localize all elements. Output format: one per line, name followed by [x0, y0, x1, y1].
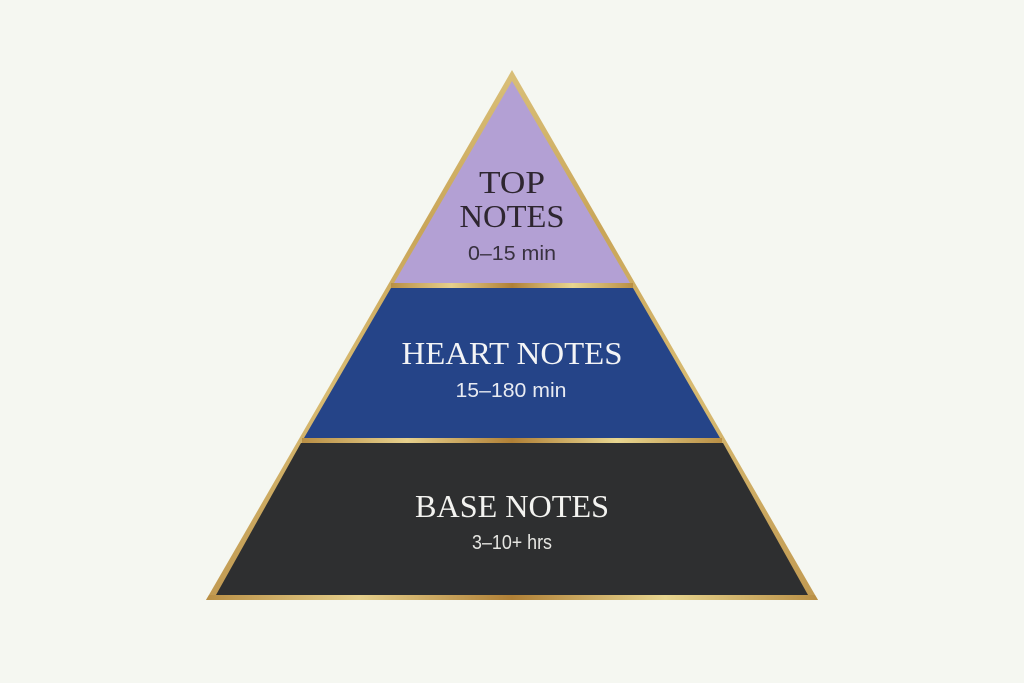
panel: top notes [394, 81, 630, 283]
heading: top notes line two: NOTES [460, 198, 564, 234]
panel: heart notes [304, 288, 720, 438]
divider: heart and base [302, 438, 722, 443]
duration: heart notes: 15–180 min [456, 380, 566, 402]
gold pyramid frame [206, 70, 818, 600]
base gold edge [206, 595, 818, 600]
heading: heart notes: HEART NOTES [402, 335, 622, 371]
duration: base notes: 3–10+ hrs [472, 532, 552, 554]
duration: top notes: 0–15 min [468, 243, 556, 265]
divider: top and heart [391, 283, 633, 288]
heading: top notes: TOP [479, 164, 545, 200]
panel: base notes [216, 443, 808, 595]
heading: base notes: BASE NOTES [415, 488, 609, 524]
